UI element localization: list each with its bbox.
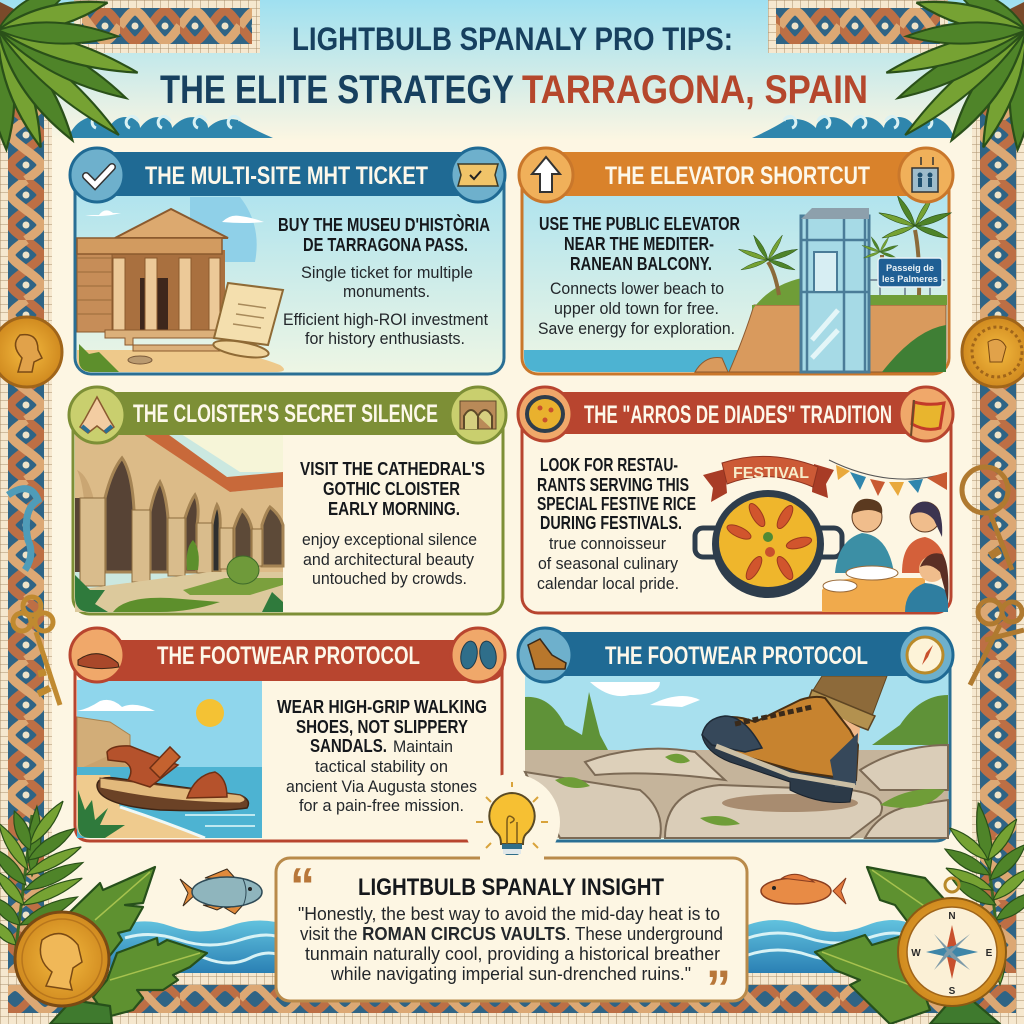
palm top left [0,0,140,151]
heading: THE FOOTWEAR PROTOCOL [157,642,420,670]
header band [524,632,950,676]
text block: SPECIAL FESTIVE RICE [537,494,696,514]
quote text: "Honestly, the best way to avoid the mid-day heat is to [298,904,720,924]
icon: spanish flag [899,387,953,441]
text block: USE THE PUBLIC ELEVATOR [539,214,740,234]
text block: RANEAN BALCONY. [570,254,712,274]
text block: calendar local pride. [537,574,679,593]
quote mark open: “ [290,858,315,914]
text block: Efficient high-ROI investment [283,310,488,329]
panel: multi-site ticket [70,148,505,374]
coin left [0,317,62,387]
text block: RANTS SERVING THIS [537,475,689,495]
big leaves bottom right [815,867,1000,1024]
text block: Connects lower beach to [550,279,724,298]
text block: WEAR HIGH-GRIP WALKING [277,697,487,717]
text block [537,455,696,593]
icon: ticket [451,148,505,202]
text block: Save energy for exploration. [538,319,735,338]
heading: THE CLOISTER'S SECRET SILENCE [133,400,438,428]
icon: compass small [899,628,953,682]
key left [13,597,60,705]
key right upper [962,467,1012,570]
illustration: gothic cloister [75,430,283,612]
icon: paella pan [518,387,572,441]
fish right [761,874,846,904]
panel: cloister [69,387,506,614]
compass: S [949,986,956,997]
illustration: boot on stones [525,676,948,838]
compass: W [911,948,921,959]
text block: LOOK FOR RESTAU- [540,455,678,475]
coin right [962,317,1024,387]
icon: elevator [899,148,953,202]
quote text [298,904,723,984]
quote mark close: ” [706,960,731,1016]
text block: SANDALS. [310,736,387,756]
text block: and architectural beauty [303,550,474,569]
lightbulb [464,774,560,870]
text block [278,214,490,348]
text block: GOTHIC CLOISTER [323,479,460,499]
icon: up arrow [519,148,573,202]
sign: Passeig de [886,263,934,273]
icon: arches [450,387,506,443]
text block: EARLY MORNING. [328,499,460,519]
serpent ornament left [8,489,38,570]
text block: untouched by crowds. [312,569,467,588]
icon: footprints [451,628,505,682]
compass [898,878,1006,1006]
text block: of seasonal culinary [538,554,678,573]
header band [74,640,504,681]
text block [538,214,740,338]
illustration: festive paella [695,460,948,612]
quote text: visit the ROMAN CIRCUS VAULTS. These underground [300,924,723,944]
illustration: sandal on beach [77,680,262,838]
heading: LIGHTBULB SPANALY INSIGHT [358,874,664,901]
text block [277,697,487,815]
header sky [0,0,1024,140]
wave decoration left [68,116,273,138]
heading: THE ELEVATOR SHORTCUT [605,162,870,190]
compass: N [948,911,956,922]
title: TARRAGONA, SPAIN [522,68,868,112]
festival banner [703,456,834,502]
text block: DURING FESTIVALS. [540,513,682,533]
panel: insight quote [276,855,747,1016]
icon: check [70,148,124,202]
panel: footwear boot [518,628,953,841]
big leaves bottom left [50,867,207,1024]
title: THE ELITE STRATEGY [160,68,514,112]
palm top right [884,0,1024,151]
text block: DE TARRAGONA PASS. [303,235,468,255]
icon: sandal [70,628,124,682]
panel: footwear sandals [70,628,505,841]
text block: for a pain-free mission. [299,796,464,815]
text block: monuments. [343,282,430,301]
text block: tactical stability on [315,757,448,776]
text block: Single ticket for multiple [301,263,473,282]
header band [523,152,948,196]
text block: ancient Via Augusta stones [286,777,477,796]
heading: THE MULTI-SITE MHT TICKET [145,162,428,190]
bottom sea bands [110,920,915,973]
header band [76,152,503,196]
panel: elevator shortcut [519,148,953,374]
illustration: elevator and cliff [524,194,952,372]
quote text: while navigating imperial sun-drenched ruins." [330,964,691,984]
text block: Maintain [393,737,453,756]
palm frond bottom left [0,798,86,955]
title [160,21,868,112]
heading: THE FOOTWEAR PROTOCOL [605,642,868,670]
text block: true connoisseur [549,534,666,553]
title: LIGHTBULB SPANALY PRO TIPS: [292,21,733,57]
text block: BUY THE MUSEU D'HISTÒRIA [278,214,490,235]
text block: NEAR THE MEDITER- [564,234,714,254]
key right lower [970,600,1024,685]
text block: enjoy exceptional silence [302,530,477,549]
panel: arros de diades [518,387,953,613]
illustration: temple and scroll [77,197,284,372]
icon: praying hands [69,387,125,443]
festival banner: FESTIVAL [733,465,809,482]
wave decoration right [752,116,954,138]
fish left [180,869,262,914]
compass: E [986,948,993,959]
coin bottom left [15,912,109,1006]
quote text: tunmain naturally cool, providing a historical breather [305,944,720,964]
text block: for history enthusiasts. [305,329,465,348]
sign: les Palmeres [882,274,938,284]
icon: boot [518,628,572,682]
text block: SHOES, NOT SLIPPERY [296,717,468,737]
text block: VISIT THE CATHEDRAL'S [300,459,485,479]
text block: upper old town for free. [554,299,719,318]
header band [74,392,502,435]
sign [878,258,942,287]
text block [300,459,485,588]
palm frond bottom right [942,802,1024,985]
header band [523,392,950,434]
